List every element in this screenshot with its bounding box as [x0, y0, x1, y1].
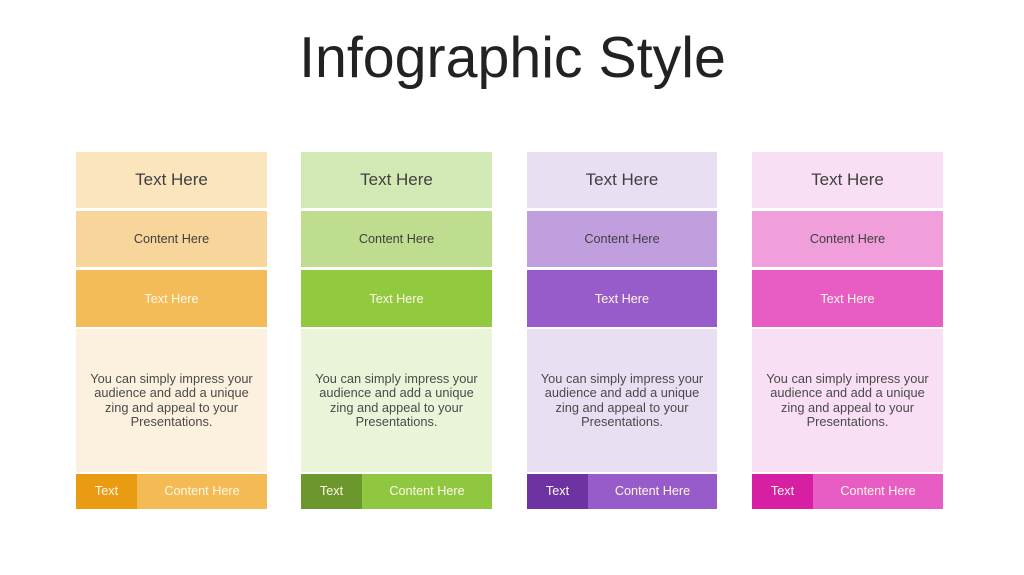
footer content: orange: Content Here [164, 484, 240, 498]
text band: green [301, 270, 492, 327]
body text: green: You can simply impress your [315, 371, 478, 386]
heading: green [301, 152, 492, 208]
body text: pink: Presentations. [807, 414, 888, 429]
footer content: green: Content Here [389, 484, 465, 498]
footer label: pink: Text [771, 484, 794, 498]
body text: purple: You can simply impress your [541, 371, 703, 386]
body text: green: zing and appeal to your [330, 400, 463, 414]
content band: orange [76, 211, 267, 267]
body text: purple: Presentations. [581, 414, 663, 429]
heading: orange [76, 152, 267, 208]
title: Infographic Style [299, 26, 726, 90]
footer content: purple: Content Here [615, 484, 690, 498]
heading: pink [752, 152, 943, 208]
text band: purple [527, 270, 717, 327]
body text: green: audience and add a unique [319, 385, 474, 400]
heading: pink: Text Here [811, 170, 884, 189]
text band: green: Text Here [369, 292, 424, 306]
footer label: green [301, 474, 362, 509]
body text: orange: zing and appeal to your [105, 400, 238, 414]
heading: purple: Text Here [586, 170, 658, 189]
text band: orange [76, 270, 267, 327]
footer content: orange [137, 474, 267, 509]
text band: pink [752, 270, 943, 327]
body text: pink: zing and appeal to your [781, 400, 914, 414]
footer label: orange: Text [95, 484, 118, 498]
heading: purple [527, 152, 717, 208]
text band: pink: Text Here [820, 292, 875, 306]
heading: green: Text Here [360, 170, 433, 189]
body text: orange [76, 329, 267, 472]
panel: purple column [527, 152, 717, 509]
footer: purple [527, 474, 717, 509]
panel: green column [301, 152, 492, 509]
footer content: pink: Content Here [840, 484, 916, 498]
body text: pink [752, 329, 943, 472]
footer content: purple [588, 474, 717, 509]
content band: pink: Content Here [810, 232, 885, 246]
footer label: orange [76, 474, 137, 509]
content band: orange: Content Here [134, 232, 209, 246]
body text: green: Presentations. [356, 414, 437, 429]
content band: purple: Content Here [584, 232, 660, 246]
body text: pink: You can simply impress your [766, 371, 929, 386]
footer: pink [752, 474, 943, 509]
body text: green [301, 329, 492, 472]
content band: purple [527, 211, 717, 267]
body text: orange: Presentations. [131, 414, 212, 429]
footer content: pink [813, 474, 943, 509]
footer: green [301, 474, 492, 509]
footer content: green [362, 474, 492, 509]
content band: green: Content Here [359, 232, 434, 246]
footer label: pink [752, 474, 813, 509]
text band: purple: Text Here [595, 292, 649, 306]
heading: orange: Text Here [135, 170, 208, 189]
footer label: green: Text [320, 484, 343, 498]
body text: purple [527, 329, 717, 472]
panel: pink column [752, 152, 943, 509]
content band: pink [752, 211, 943, 267]
footer: orange [76, 474, 267, 509]
text band: orange: Text Here [144, 292, 199, 306]
body text: orange: You can simply impress your [90, 371, 253, 386]
content band: green [301, 211, 492, 267]
body text: purple: zing and appeal to your [555, 400, 689, 414]
body text: pink: audience and add a unique [770, 385, 925, 400]
footer label: purple [527, 474, 588, 509]
footer label: purple: Text [546, 484, 569, 498]
body text: orange: audience and add a unique [94, 385, 249, 400]
body text: purple: audience and add a unique [545, 385, 699, 400]
panel: orange column [76, 152, 267, 509]
